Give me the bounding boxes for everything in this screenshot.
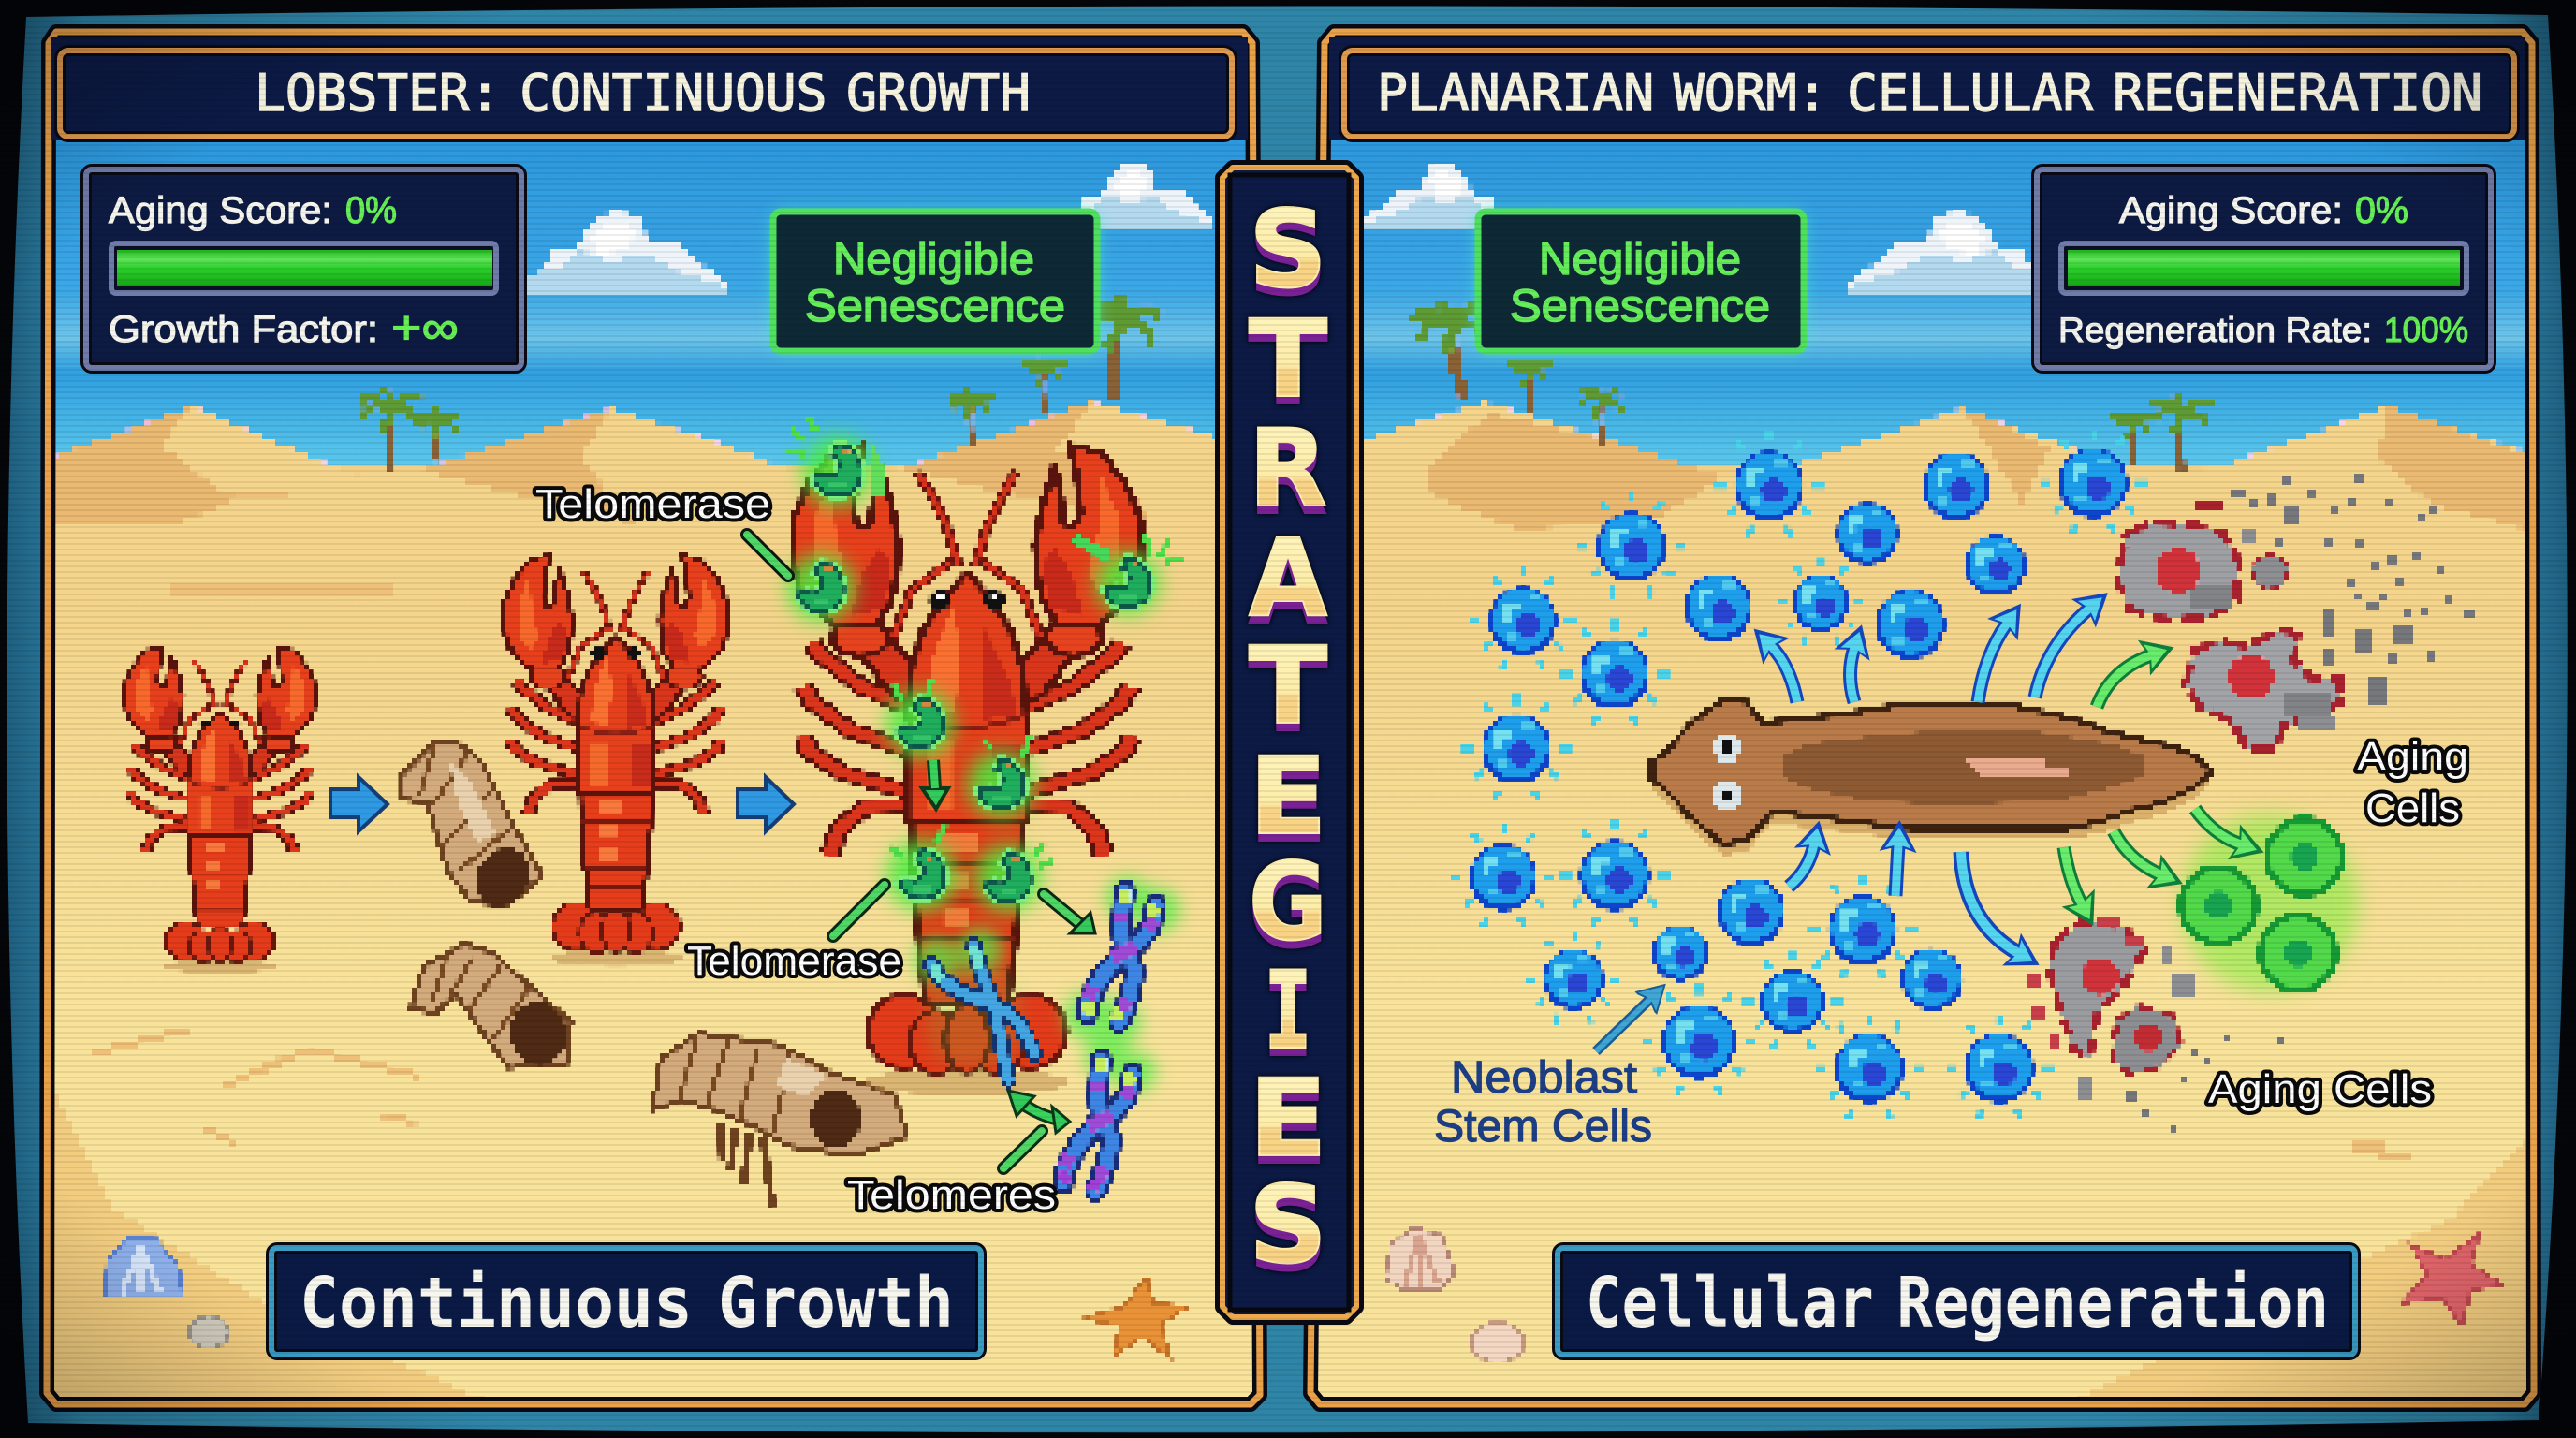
badge: negligible senescence left [773,212,1097,351]
status panel: lobster [86,169,521,368]
icon: shells and starfish right [1385,1227,2501,1362]
telomerase glow [787,435,1160,912]
aging score bar [111,243,496,293]
heading: planarian: PLANARIAN WORM: CELLULAR REGENERATION [1377,64,2482,123]
panel: lobster continuous growth [37,131,1273,1414]
title letters: G [1249,840,1327,964]
badge: negligible senescence left: Negligible [833,235,1034,285]
label: telomeres: Telomeres [847,1172,1056,1218]
chromosome: telomeres bottom [1063,1060,1133,1190]
status panel: planarian [2037,169,2491,368]
icon: healthy green cells [2181,819,2342,990]
panel frame left [47,32,1260,1404]
icon: neoblast stem cells [1451,429,2147,1119]
title letters: T [1249,297,1327,421]
icon: small lobster [125,646,315,973]
status panel: lobster: Growth Factor: [109,309,378,350]
status panel: lobster: Aging Score: [109,190,332,231]
arrows: blue regeneration arrows up [1771,609,2089,953]
title letters: R [1249,406,1327,531]
title letters [1249,187,1327,1287]
title letters: A [1249,516,1327,640]
title letters: S [1249,187,1327,312]
arrow: enzyme to chromosome [1044,894,1095,933]
panel: planarian cellular regeneration [1306,131,2546,1414]
plaque: cellular regeneration [1558,1248,2355,1355]
arrow: telomeres pointer [1003,1131,1042,1168]
badge: negligible senescence right: Negligible [1539,235,1741,285]
telomerase enzymes on large lobster [784,418,1181,901]
status panel: planarian: 0% [2355,190,2408,231]
icon: shed shells and decorative sand items [105,741,1187,1357]
status panel: planarian: Aging Score: [2119,190,2343,231]
central title column: strategies [1222,168,1356,1317]
icon: medium lobster [505,555,727,966]
arrow: double headed telomere [1008,1091,1070,1133]
title letters: E [1249,1056,1327,1181]
glow: green healthy cells [2181,814,2359,992]
arrow: telomerase pointer top [747,535,788,576]
label: aging cells stacked [2357,734,2468,831]
icon: planarian worm [1652,699,2212,856]
title letters: E [1249,734,1327,858]
icon: growth arrow one [330,777,388,831]
title letters: I [1264,948,1312,1073]
chromosome: telomeres top [1087,891,1156,1021]
badge: negligible senescence right: Senescence [1510,282,1770,331]
aging score bar [2061,243,2466,293]
label: neoblast stem cells [1434,1053,1652,1152]
heading: lobster [51,37,1248,140]
arrow: enzyme down [922,760,948,809]
arrow: telomerase pointer lower [833,885,885,936]
arrows: green renewal arrows [2064,655,2241,904]
chromosome: on lobster tail [930,941,1037,1088]
badge: negligible senescence right [1478,212,1804,351]
label: telomerase top: Telomerase [535,481,770,527]
panel frame right [1310,32,2534,1404]
icon: aging cells upper [2117,501,2340,749]
status panel: planarian: 100% [2384,311,2468,349]
badge: negligible senescence left: Senescence [805,282,1065,331]
label: aging cells stacked: Aging [2357,734,2468,780]
status panel: lobster: +∞ [391,301,459,354]
status panel: planarian: Regeneration Rate: [2058,311,2372,349]
scene background: beach and dunes left [37,131,1273,1414]
icon: large lobster [793,445,1141,1095]
status panel: lobster: 0% [345,190,397,231]
icon: growth arrow two [738,777,794,831]
label: aging cells lower: Aging Cells [2208,1066,2432,1112]
plaque: continuous growth: Continuous Growth [300,1263,954,1343]
heading: planarian [1329,37,2525,140]
label: neoblast stem cells: Stem Cells [1434,1102,1652,1152]
plaque: cellular regeneration: Cellular Regeneration [1586,1263,2329,1343]
scene background: beach and dunes right [1306,131,2546,1414]
title letters: S [1249,1163,1327,1287]
heading: lobster: LOBSTER: CONTINUOUS GROWTH [255,64,1031,123]
label: aging cells stacked: Cells [2365,785,2460,831]
icon: aging cells lower [2027,917,2196,1099]
label: neoblast stem cells: Neoblast [1451,1053,1637,1103]
title letters: T [1249,624,1327,748]
arrow: neoblast pointer [1596,998,1651,1051]
icon: aging cell debris [2126,474,2475,1133]
chromosome glow [914,876,1180,1093]
label: telomerase lower: Telomerase [687,938,901,984]
